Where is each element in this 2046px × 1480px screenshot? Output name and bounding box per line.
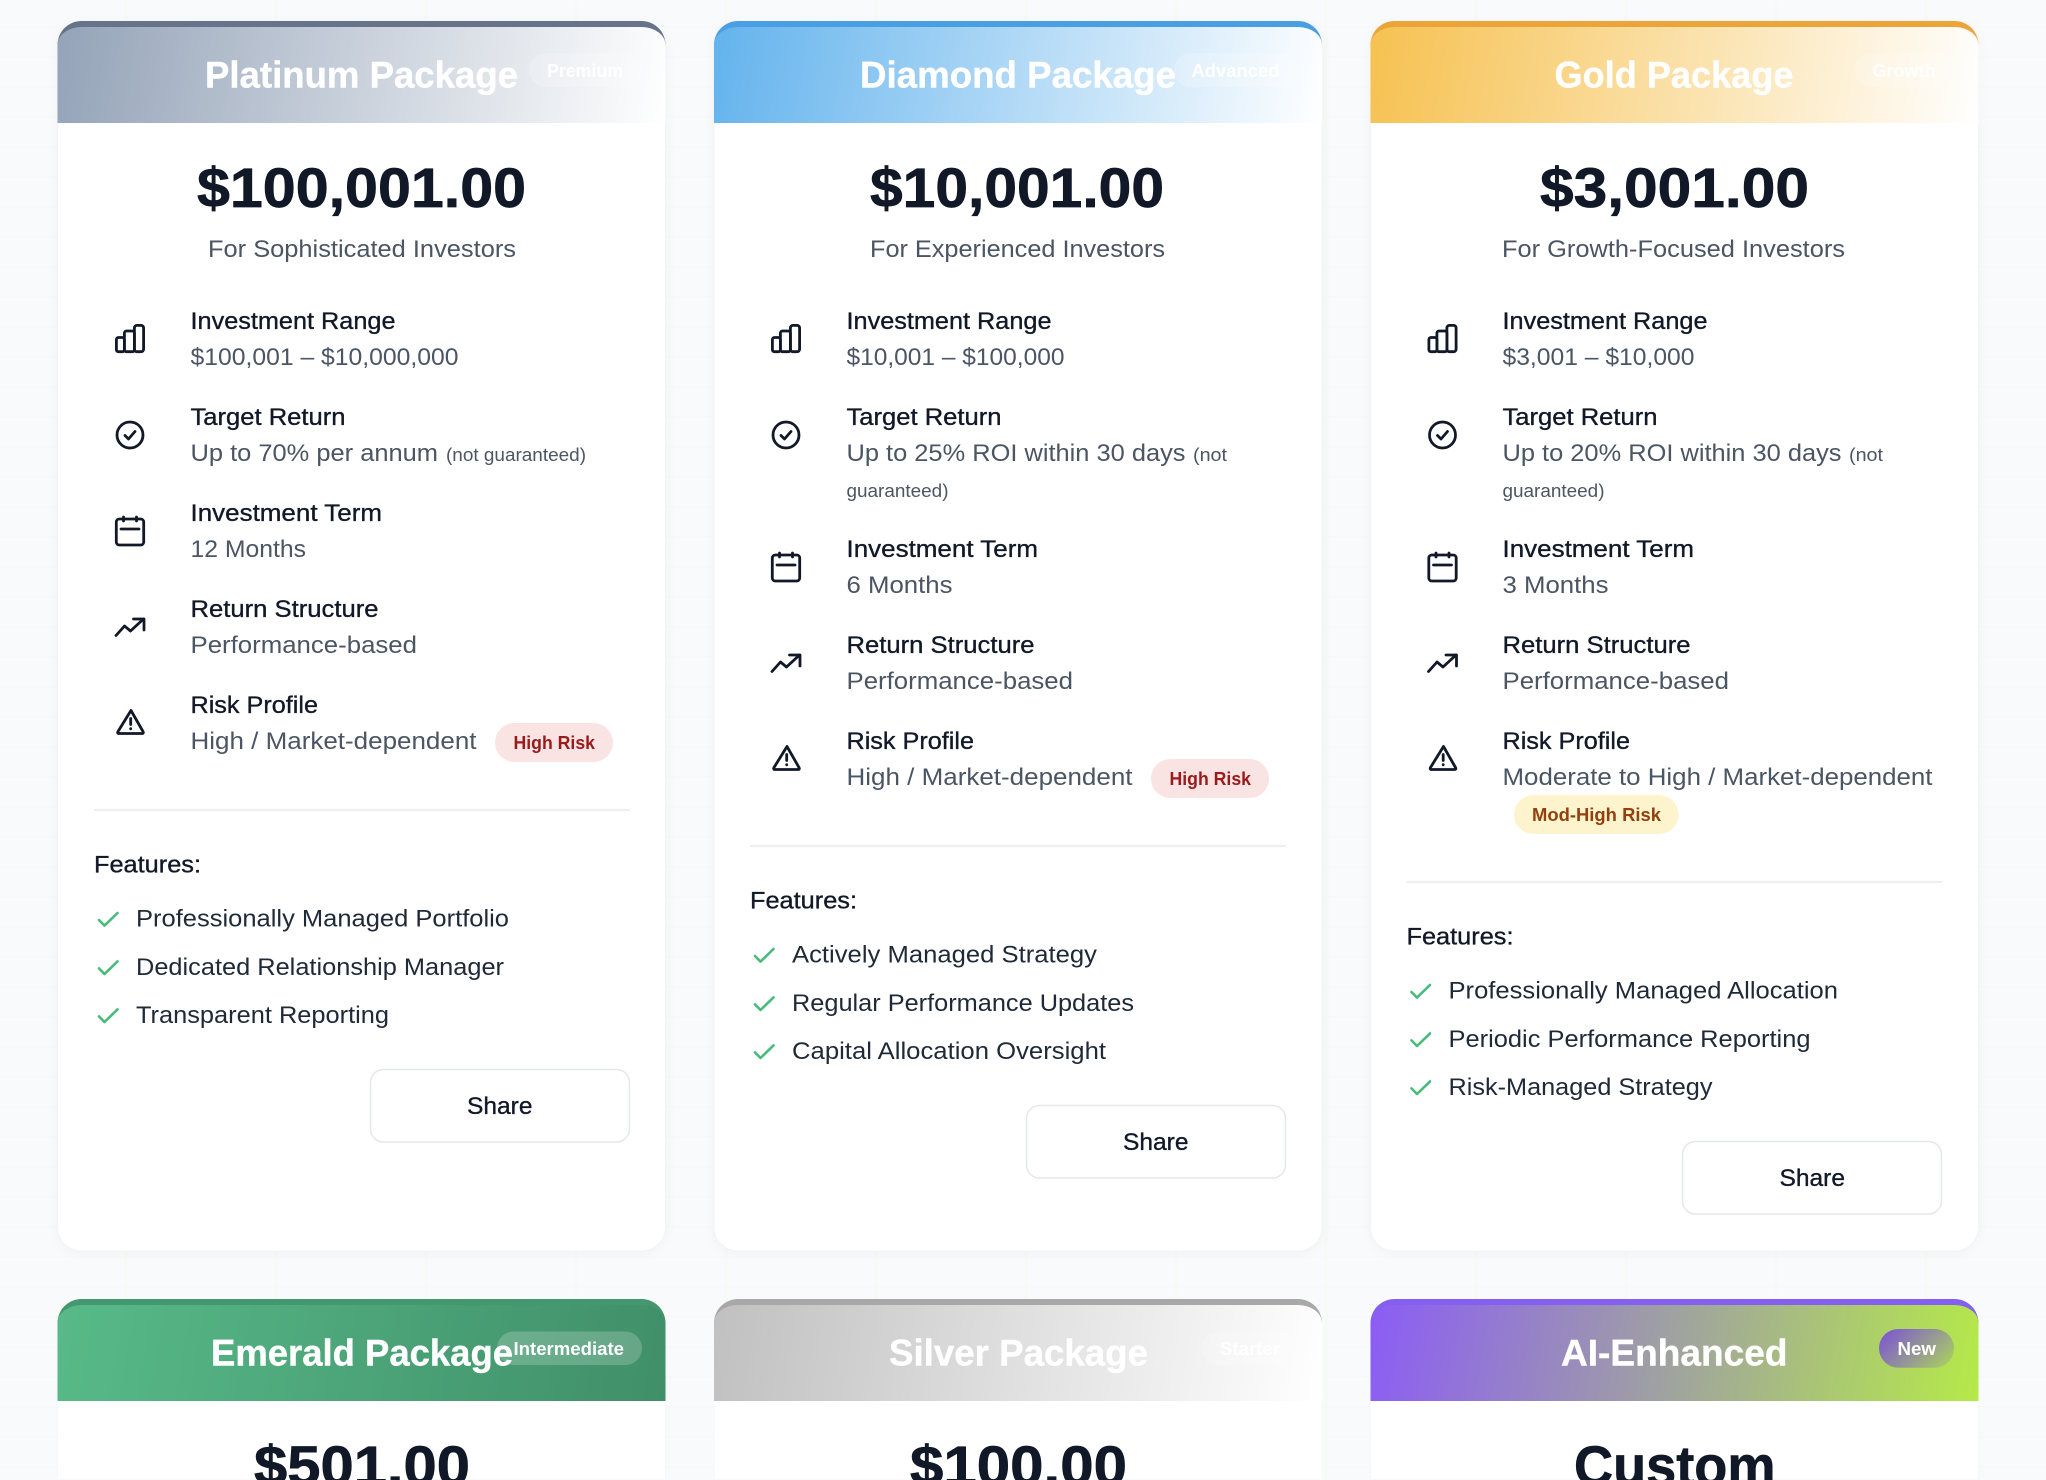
header: Diamond Package: Advanced xyxy=(1192,60,1280,81)
investment term: 6 Months xyxy=(846,572,952,599)
return structure: Return Structure xyxy=(846,632,1034,659)
price: $100,001.00 xyxy=(197,156,526,219)
target return: guaranteed) xyxy=(1502,480,1604,501)
investor type: For Experienced Investors xyxy=(870,236,1165,263)
features list: Professionally Managed Allocation xyxy=(1448,978,1838,1005)
risk profile xyxy=(846,728,1133,791)
header: Gold Package: Gold Package xyxy=(1554,54,1794,96)
investment range xyxy=(190,308,458,371)
investment term xyxy=(1502,536,1694,599)
target return: Up to 70% per annum xyxy=(190,440,438,467)
investment term: 12 Months xyxy=(190,536,306,563)
panel: Diamond Package card xyxy=(714,21,1322,1251)
features list: Risk-Managed Strategy xyxy=(1448,1074,1713,1101)
button: share xyxy=(1026,1106,1286,1178)
icon: warning triangle xyxy=(118,710,143,734)
header: Silver Package: Starter xyxy=(1220,1338,1280,1359)
features list xyxy=(1406,924,1838,1101)
panel: AI-Enhanced card xyxy=(1370,1299,1978,1480)
badge: mod-high risk: Mod-High Risk xyxy=(1532,804,1662,825)
header: Diamond Package xyxy=(714,21,1322,123)
header: Emerald Package: Emerald Package xyxy=(211,1332,513,1374)
icon: check circle xyxy=(117,422,143,448)
panel: Emerald Package card xyxy=(58,1299,666,1480)
button: share xyxy=(1682,1142,1942,1214)
investment term: Investment Term xyxy=(1502,536,1694,563)
target return xyxy=(1502,404,1883,501)
target return xyxy=(190,404,586,467)
button: share xyxy=(370,1070,630,1142)
features list xyxy=(750,888,1134,1065)
target return: Up to 25% ROI within 30 days xyxy=(846,440,1186,467)
icon: check circle xyxy=(773,422,799,448)
risk profile: High / Market-dependent xyxy=(190,728,477,755)
header: Silver Package: Silver Package xyxy=(889,1332,1148,1374)
return structure xyxy=(1502,632,1729,695)
badge: high risk xyxy=(495,723,613,762)
button: share: Share xyxy=(467,1093,532,1120)
investment range xyxy=(846,308,1064,371)
investment term: Investment Term xyxy=(846,536,1038,563)
target return: Target Return xyxy=(1502,404,1658,431)
icon: calendar xyxy=(116,517,144,545)
return structure: Performance-based xyxy=(1502,668,1729,695)
header: AI-Enhanced: AI-Enhanced xyxy=(1561,1332,1788,1374)
header: Gold Package: Growth xyxy=(1872,60,1936,81)
target return: (not xyxy=(1193,444,1227,465)
target return: (not guaranteed) xyxy=(446,444,586,465)
investor type: For Growth-Focused Investors xyxy=(1502,236,1845,263)
features list: Regular Performance Updates xyxy=(792,990,1134,1017)
price: $3,001.00 xyxy=(1540,156,1809,219)
icon: check circle xyxy=(1430,422,1456,448)
return structure xyxy=(190,596,417,659)
risk profile: High / Market-dependent xyxy=(846,764,1133,791)
icon: trending up xyxy=(772,655,800,672)
panel: Gold Package card xyxy=(1370,21,1978,1251)
features list: Actively Managed Strategy xyxy=(792,942,1098,969)
investment range: Investment Range xyxy=(846,308,1052,335)
investment range: Investment Range xyxy=(190,308,396,335)
button: share: Share xyxy=(1780,1165,1845,1192)
badge: high risk xyxy=(1151,759,1269,798)
icon: calendar xyxy=(1429,553,1456,581)
features list: Professionally Managed Portfolio xyxy=(136,906,509,933)
header: Emerald Package: Intermediate xyxy=(514,1338,624,1359)
icon: bar chart xyxy=(772,325,800,352)
header: Platinum Package xyxy=(58,21,666,123)
target return: Target Return xyxy=(846,404,1002,431)
investment range: $100,001 – $10,000,000 xyxy=(190,344,458,371)
icon: bar chart xyxy=(1429,325,1456,352)
return structure: Return Structure xyxy=(1502,632,1690,659)
features list: Periodic Performance Reporting xyxy=(1448,1026,1810,1053)
target return: guaranteed) xyxy=(846,480,948,501)
target return: Up to 20% ROI within 30 days xyxy=(1502,440,1842,467)
risk profile: Risk Profile xyxy=(1502,728,1630,755)
target return xyxy=(846,404,1227,501)
investment term xyxy=(846,536,1038,599)
price: $10,001.00 xyxy=(870,156,1164,219)
risk profile: Risk Profile xyxy=(846,728,974,755)
return structure: Return Structure xyxy=(190,596,378,623)
features list: Transparent Reporting xyxy=(136,1002,389,1029)
risk profile xyxy=(1502,728,1933,791)
panel: Platinum Package card xyxy=(58,21,666,1251)
icon: trending up xyxy=(1428,655,1456,672)
features list: Dedicated Relationship Manager xyxy=(136,954,504,981)
return structure xyxy=(846,632,1073,695)
badge: mod-high risk xyxy=(1514,795,1678,834)
badge: high risk: High Risk xyxy=(1170,768,1252,789)
investment range: Investment Range xyxy=(1502,308,1708,335)
investment range: $3,001 – $10,000 xyxy=(1502,344,1694,371)
investment range: $10,001 – $100,000 xyxy=(846,344,1064,371)
header: Gold Package xyxy=(1370,21,1978,123)
panel: Silver Package card xyxy=(714,1299,1322,1480)
risk profile: Risk Profile xyxy=(190,692,318,719)
icon: bar chart xyxy=(116,325,144,352)
features list: Features: xyxy=(750,888,857,915)
icon: warning triangle xyxy=(1430,746,1456,770)
features list: Features: xyxy=(1406,924,1514,951)
badge: high risk: High Risk xyxy=(514,732,596,753)
risk profile: Moderate to High / Market-dependent xyxy=(1502,764,1933,791)
target return: Target Return xyxy=(190,404,346,431)
header: AI-Enhanced xyxy=(1370,1299,1978,1401)
features list: Capital Allocation Oversight xyxy=(792,1038,1106,1065)
investment term: Investment Term xyxy=(190,500,382,527)
icon: warning triangle xyxy=(774,746,799,770)
investment term xyxy=(190,500,382,563)
header: AI-Enhanced: New xyxy=(1898,1338,1937,1359)
header: Emerald Package xyxy=(58,1299,666,1401)
investor type: For Sophisticated Investors xyxy=(208,236,516,263)
icon: calendar xyxy=(772,553,800,581)
return structure: Performance-based xyxy=(846,668,1073,695)
button: share: Share xyxy=(1123,1129,1188,1156)
header: Platinum Package: Platinum Package xyxy=(205,54,518,96)
features list xyxy=(94,852,509,1029)
investment range xyxy=(1502,308,1708,371)
investment term: 3 Months xyxy=(1502,572,1608,599)
header: Platinum Package: Premium xyxy=(547,60,623,81)
features list: Features: xyxy=(94,852,201,879)
return structure: Performance-based xyxy=(190,632,417,659)
header: Silver Package xyxy=(714,1299,1322,1401)
risk profile xyxy=(190,692,477,755)
icon: trending up xyxy=(116,619,144,636)
header: Diamond Package: Diamond Package xyxy=(860,54,1176,96)
target return: (not xyxy=(1849,444,1883,465)
